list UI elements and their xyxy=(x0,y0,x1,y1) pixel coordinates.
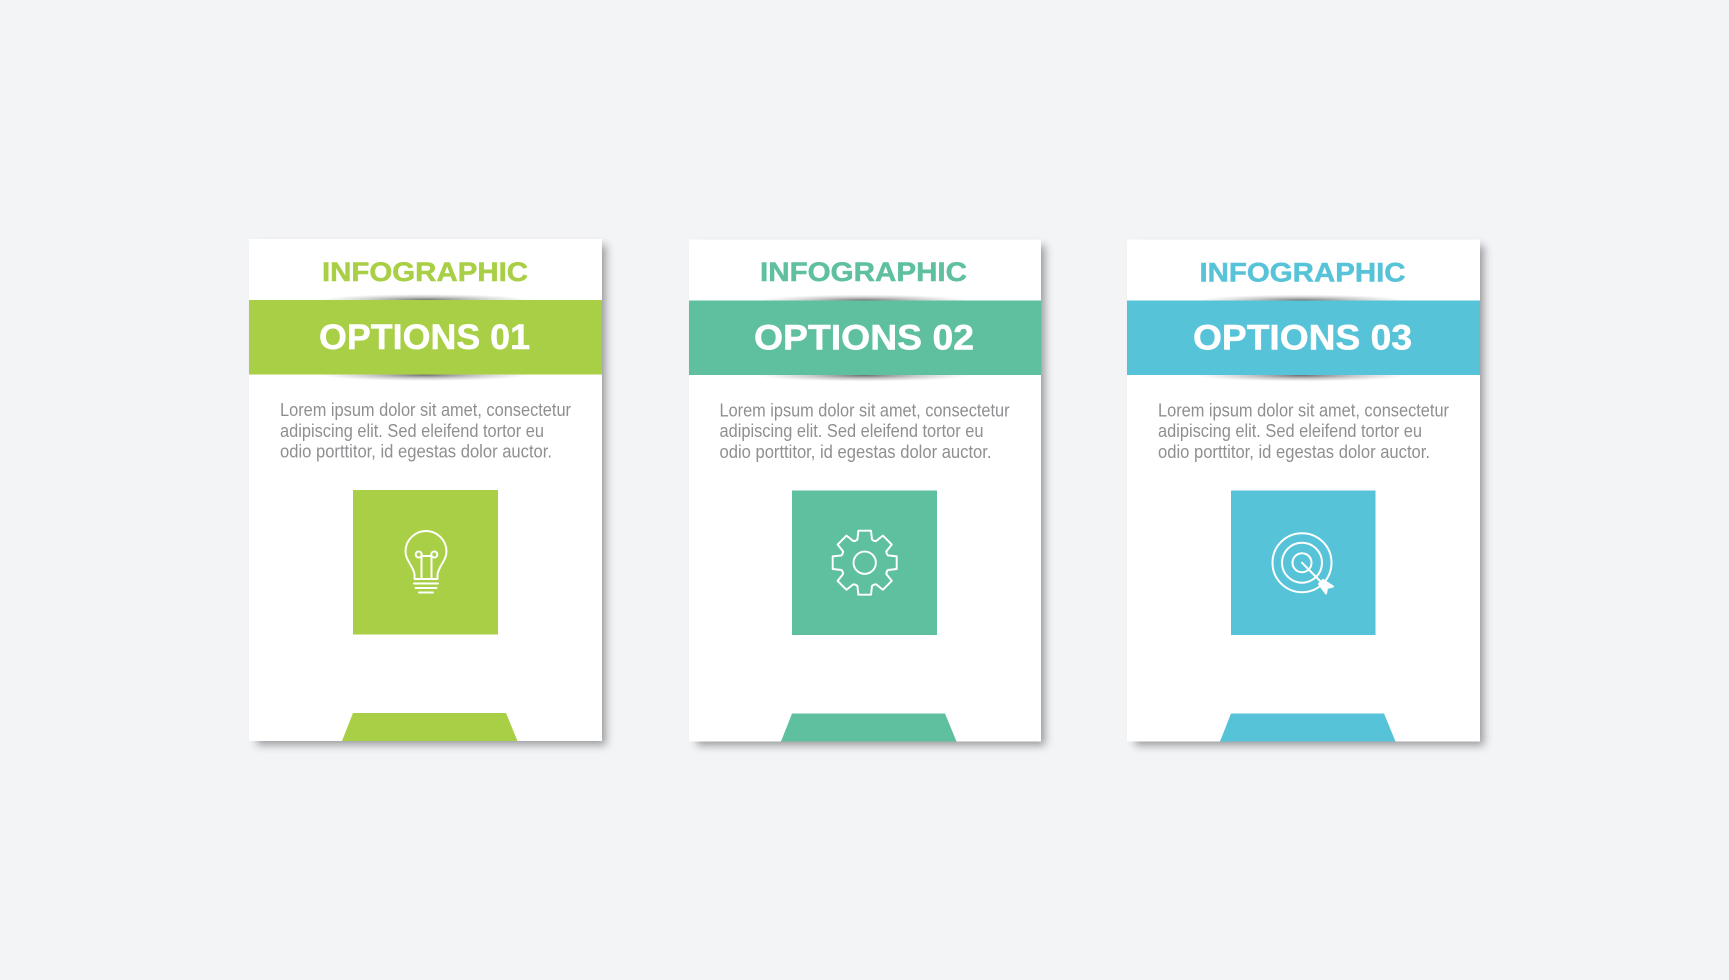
icon square 01 xyxy=(353,490,498,634)
banner: options 01: OPTIONS 01 xyxy=(319,318,530,357)
banner: options 02: OPTIONS 02 xyxy=(754,318,974,358)
text block: description 01: odio porttitor, id egestas dolor auctor. xyxy=(280,442,552,462)
bottom tab 03 xyxy=(1220,714,1396,742)
icon: light bulb xyxy=(406,531,446,592)
text block: description 02: adipiscing elit. Sed eleifend tortor eu xyxy=(720,421,984,441)
text block: description 02: Lorem ipsum dolor sit amet, consectetur xyxy=(720,400,1010,420)
icon: target with arrow xyxy=(1272,533,1333,594)
icon: gear xyxy=(833,531,897,595)
banner: options 02 xyxy=(689,300,1041,375)
icon square 03 xyxy=(1231,490,1376,635)
text block: description 01 xyxy=(280,400,571,462)
panel: option 02 xyxy=(689,240,1045,746)
text block: description 02: odio porttitor, id egestas dolor auctor. xyxy=(720,442,992,462)
text block: description 01: Lorem ipsum dolor sit amet, consectetur xyxy=(280,400,571,420)
text block: description 03: adipiscing elit. Sed eleifend tortor eu xyxy=(1158,421,1422,441)
text block: description 02 xyxy=(720,400,1010,462)
text block: description 03: odio porttitor, id egestas dolor auctor. xyxy=(1158,442,1430,462)
icon square 02 xyxy=(792,490,937,635)
banner: options 03 xyxy=(1127,300,1480,375)
panel: option 01 xyxy=(249,239,606,745)
text block: description 01: adipiscing elit. Sed eleifend tortor eu xyxy=(280,421,544,441)
heading: infographic 02: INFOGRAPHIC xyxy=(760,257,967,287)
banner: options 03: OPTIONS 03 xyxy=(1193,318,1412,358)
panel: option 03 xyxy=(1127,240,1484,746)
bottom tab 02 xyxy=(781,714,956,742)
bottom tab 01 xyxy=(342,713,518,741)
heading: infographic 03: INFOGRAPHIC xyxy=(1200,258,1406,288)
text block: description 03: Lorem ipsum dolor sit amet, consectetur xyxy=(1158,400,1449,420)
heading: infographic 01: INFOGRAPHIC xyxy=(322,257,528,287)
text block: description 03 xyxy=(1158,400,1449,462)
banner: options 01 xyxy=(249,300,602,374)
